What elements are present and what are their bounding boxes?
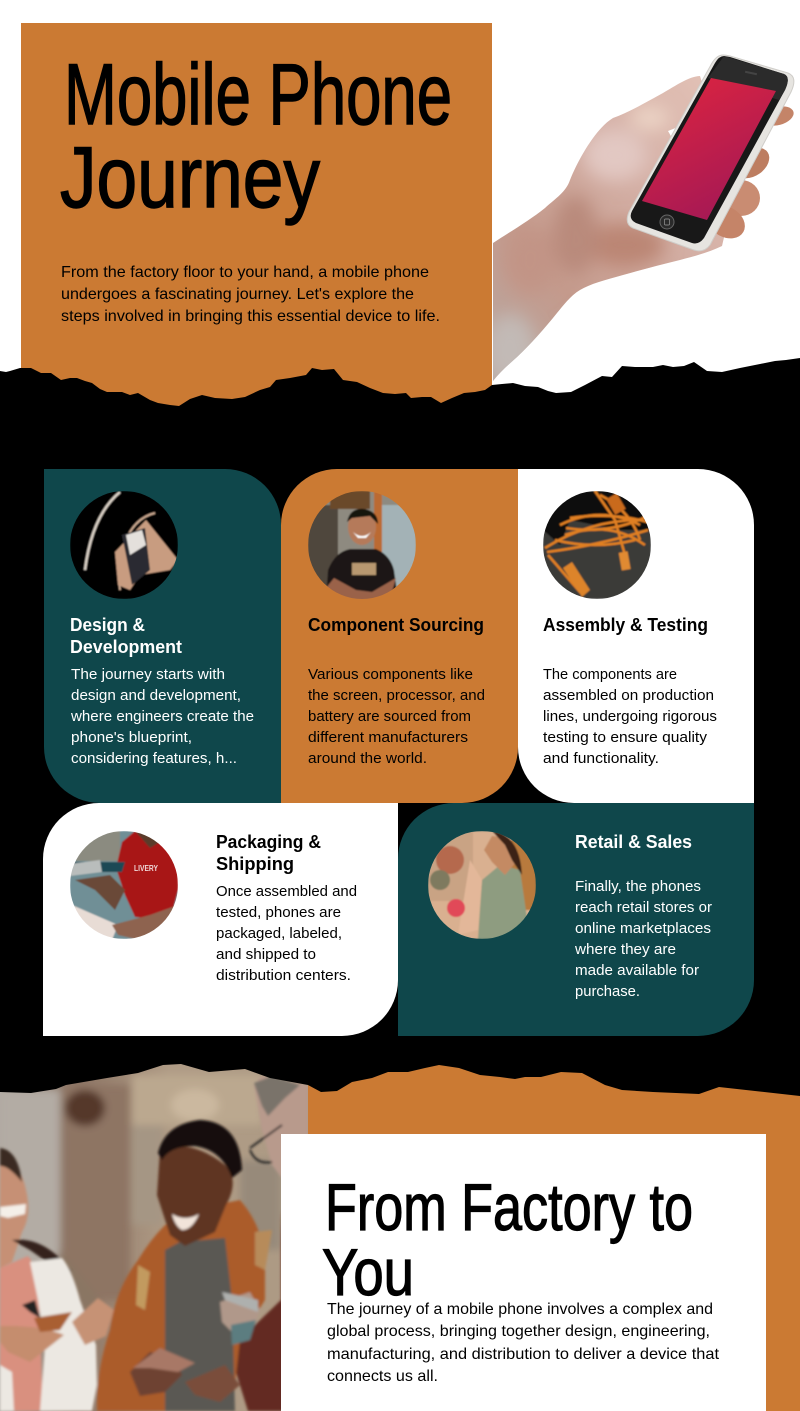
photo: retail seller xyxy=(428,831,536,939)
body text: around the world. xyxy=(308,750,427,767)
body text: distribution centers. xyxy=(216,967,351,984)
icon: phone xyxy=(627,55,794,251)
heading: Assembly & Testing xyxy=(543,615,708,635)
body text: phone's blueprint, xyxy=(71,729,192,746)
conclusion text: connects us all. xyxy=(327,1368,438,1385)
orange torn band xyxy=(308,1065,800,1411)
body text xyxy=(216,883,357,984)
title: Journey xyxy=(60,130,320,226)
heading: Development xyxy=(70,637,182,657)
photo: design xyxy=(70,491,178,599)
title xyxy=(60,47,452,226)
body text: and functionality. xyxy=(543,750,659,767)
body text xyxy=(574,878,712,1000)
body text: assembled on production xyxy=(543,687,714,704)
photo: group of friends with phones xyxy=(0,1050,308,1411)
panel: packaging and shipping xyxy=(43,803,398,1036)
image: hand holding phone xyxy=(484,70,796,390)
header panel xyxy=(21,23,492,408)
body text: The components are xyxy=(543,666,677,683)
conclusion text: manufacturing, and distribution to deliver a device that xyxy=(327,1346,720,1363)
panel: component sourcing xyxy=(281,469,518,803)
body text: different manufacturers xyxy=(308,729,468,746)
left woman xyxy=(0,1164,28,1268)
panel: assembly and testing xyxy=(518,469,754,803)
intro text: steps involved in bringing this essential device to life. xyxy=(61,308,440,325)
body text: testing to ensure quality xyxy=(543,729,708,746)
body text: considering features, h... xyxy=(71,750,237,767)
body text: Once assembled and xyxy=(216,883,357,900)
body text: and shipped to xyxy=(216,946,316,963)
body text: tested, phones are xyxy=(216,904,341,921)
body text: design and development, xyxy=(71,687,241,704)
conclusion text xyxy=(327,1301,720,1385)
heading: Design & xyxy=(70,615,145,635)
conclusion heading: You xyxy=(322,1235,414,1309)
torn edge over photo xyxy=(0,1050,308,1093)
face xyxy=(157,1146,233,1246)
photo: orange cable xyxy=(543,491,651,599)
heading: Shipping xyxy=(216,854,294,874)
body text: packaged, labeled, xyxy=(216,925,342,942)
main man jacket xyxy=(97,1200,265,1411)
panel: retail and sales xyxy=(398,803,754,1036)
intro text: From the factory floor to your hand, a mobile phone xyxy=(61,264,429,281)
body text: Finally, the phones xyxy=(575,878,701,895)
body text: battery are sourced from xyxy=(308,708,471,725)
heading xyxy=(216,832,321,874)
intro text: undergoes a fascinating journey. Let's explore the xyxy=(61,286,414,303)
body text: reach retail stores or xyxy=(575,899,712,916)
heading xyxy=(70,615,182,657)
panel: conclusion xyxy=(281,1134,766,1411)
panel: design and development xyxy=(44,469,281,803)
title: Mobile Phone xyxy=(64,47,452,143)
heading: Retail & Sales xyxy=(575,832,692,852)
heading: Component Sourcing xyxy=(308,615,484,635)
body text: where engineers create the xyxy=(70,708,254,725)
photo: delivery worker: LIVERY xyxy=(134,864,159,873)
phones and hands xyxy=(130,1352,182,1396)
black torn band xyxy=(0,358,800,1100)
body text xyxy=(70,666,254,767)
conclusion text: global process, bringing together design, engineering, xyxy=(327,1323,710,1340)
intro text xyxy=(61,264,440,325)
body text: The journey starts with xyxy=(71,666,225,683)
body text: lines, undergoing rigorous xyxy=(543,708,717,725)
heading: Packaging & xyxy=(216,832,321,852)
conclusion heading: From Factory to xyxy=(325,1170,693,1244)
body text: the screen, processor, and xyxy=(308,687,485,704)
body text: made available for xyxy=(575,962,699,979)
conclusion text: The journey of a mobile phone involves a complex and xyxy=(327,1301,713,1318)
far right man xyxy=(256,1084,308,1177)
body text: Various components like xyxy=(308,666,473,683)
body text xyxy=(543,666,717,767)
body text xyxy=(308,666,485,767)
body text: purchase. xyxy=(575,983,640,1000)
conclusion heading xyxy=(322,1170,693,1309)
photo: component sourcing xyxy=(308,491,416,604)
body text: online marketplaces xyxy=(575,920,711,937)
body text: where they are xyxy=(574,941,676,958)
photo: delivery worker xyxy=(70,831,178,940)
